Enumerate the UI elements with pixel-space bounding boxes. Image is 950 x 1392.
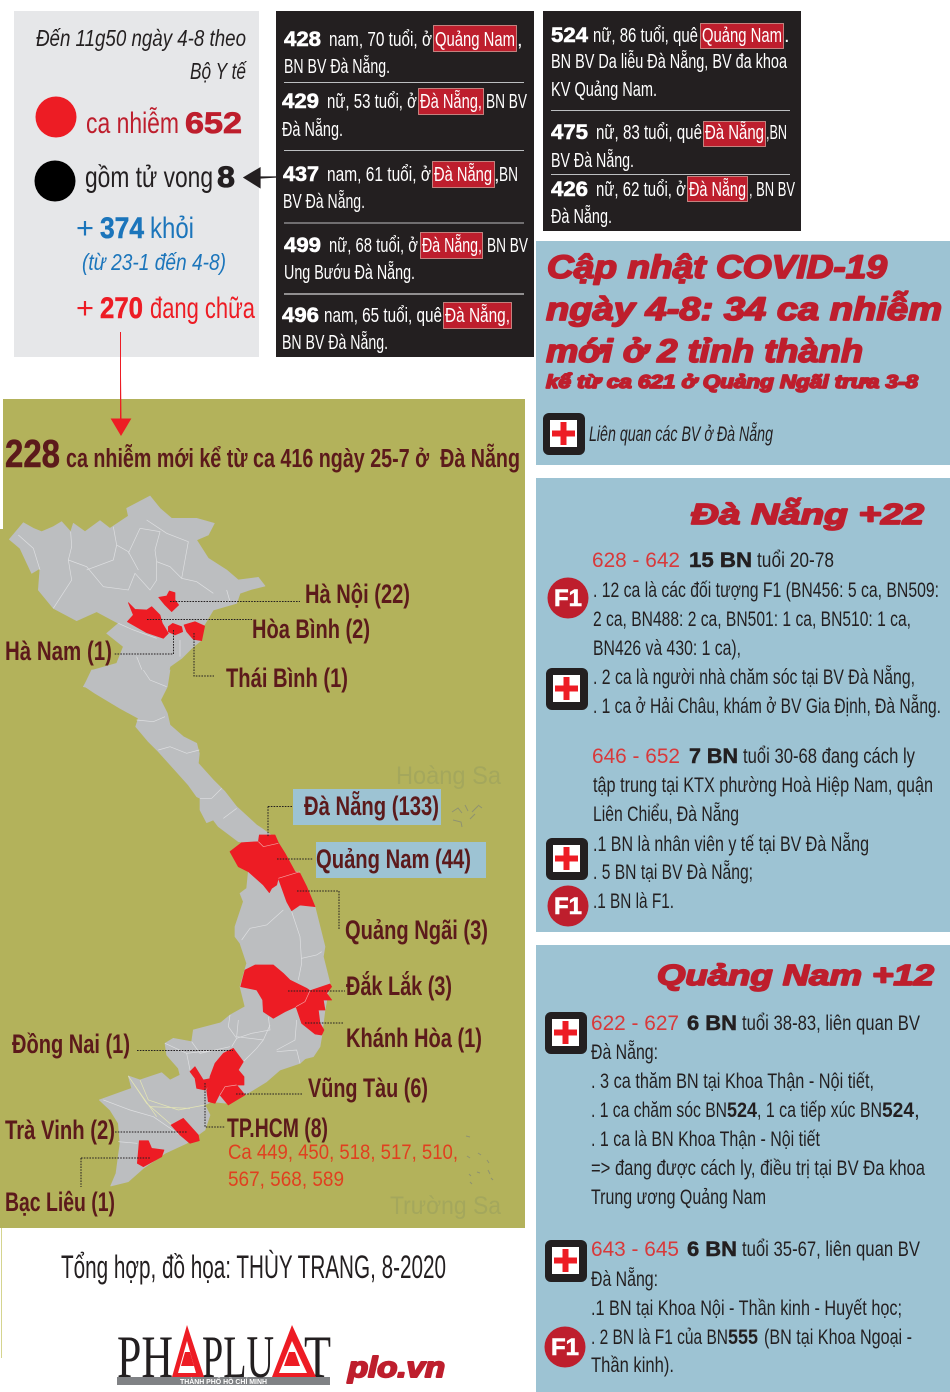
label: Ha Noi: Hà Nội (22) [305, 579, 410, 609]
province: Quang Ngai [278, 872, 315, 911]
map: central highlands land [207, 863, 330, 1063]
case group 622-627: 524 [882, 1099, 914, 1122]
label: Dong Nai: Đồng Nai (1) [12, 1029, 130, 1059]
case 437: BV Đà Nẵng. [283, 190, 365, 213]
case 499: Ung Bướu Đà Nẵng. [284, 261, 415, 284]
case 428: 428 [284, 28, 321, 51]
title: mới ở 2 tỉnh thành [546, 333, 863, 369]
label: Bac Lieu: Bạc Liêu (1) [5, 1187, 115, 1217]
case 429: nữ, 53 tuổi, ở [327, 91, 417, 113]
label: TP.HCM: TP.HCM (8) [227, 1113, 328, 1143]
icon: F1 badge [548, 886, 588, 926]
case 524: nữ, 86 tuổi, quê [593, 25, 698, 47]
case 524: BN BV Da liễu Đà Nẵng, BV đa khoa [551, 50, 788, 73]
label: Truong Sa: Trường Sa [390, 1192, 501, 1220]
case group 643-645: . 2 BN là F1 của BN [591, 1326, 728, 1349]
case 437: 437 [283, 163, 319, 186]
case group 643-645 [591, 1238, 920, 1377]
stat: total infections: ca nhiễm [86, 107, 179, 140]
stat: under treatment: + [76, 292, 94, 325]
case 428: , [517, 29, 523, 51]
case group 622-627: . 3 ca thăm BN tại Khoa Thận - Nội tiết, [591, 1070, 874, 1093]
logo: Phap Luat: PLU [202, 1324, 274, 1390]
legend label: Liên quan các BV ở Đà Nẵng [589, 423, 773, 446]
case group 622-627: . 1 ca chăm sóc BN [591, 1099, 727, 1122]
case 426: Đà Nẵng [689, 178, 746, 201]
case 426: 426 [551, 178, 588, 201]
case 499 [284, 232, 528, 284]
title: Cập nhật COVID-19 [547, 249, 887, 285]
icon: hospital legend [543, 413, 585, 455]
arrow: under-treatment to map [112, 332, 130, 435]
case 475: ,BN [766, 122, 787, 144]
label: Da Nang [293, 789, 441, 825]
stat: recovered: 374 [100, 212, 144, 245]
map title: ca nhiễm mới kể từ ca 416 ngày 25-7 ở Đà Nẵng [66, 443, 520, 473]
panel: national totals [14, 11, 259, 357]
panel: death list 1 [276, 11, 534, 357]
case 437: Đà Nẵng [434, 163, 492, 186]
case 475: Đà Nẵng [705, 121, 764, 144]
case 428: BN BV Đà Nẵng. [284, 55, 390, 78]
province: Ha Noi [159, 591, 179, 612]
case 428: Quảng Nam [435, 29, 515, 51]
stat: recovered: khỏi [150, 212, 194, 245]
text: source note [36, 25, 248, 84]
province: Bac Lieu [137, 1141, 164, 1167]
icon: F1 badge: F1 [551, 1334, 579, 1361]
province: Thai Binh [184, 622, 205, 641]
case group 628-642: 15 BN [689, 549, 752, 572]
case group 628-642: tuổi 20-78 [757, 549, 834, 572]
title [546, 249, 942, 392]
logo: Phap Luat: THÀNH PHỐ HỒ CHÍ MINH [180, 1376, 267, 1386]
case 524: . [784, 25, 790, 47]
icon: hospital [545, 1240, 587, 1282]
logo: Phap Luat: PH [117, 1324, 173, 1390]
icon: F1 badge [544, 1326, 586, 1368]
note: TP.HCM case numbers: 567, 568, 589 [228, 1168, 344, 1191]
icon: F1 badge: F1 [554, 893, 582, 920]
case 429: 429 [282, 90, 319, 113]
case group 646-652: Liên Chiểu, Đà Nẵng [593, 803, 739, 826]
case 524: Quảng Nam [702, 25, 782, 47]
case group 646-652: .1 BN là F1. [593, 890, 674, 913]
case 429: BN BV [486, 91, 527, 113]
case 426: , BN BV [749, 179, 795, 201]
islands: Truong Sa [466, 1136, 493, 1184]
case group 622-627 [591, 1012, 925, 1209]
map title [5, 433, 520, 476]
case 496: Đà Nẵng, [445, 304, 510, 327]
icon: hospital [546, 838, 588, 880]
case 437: BN [499, 164, 518, 186]
panel: death list 2 [543, 11, 801, 231]
logo: plo.vn: plo.vn [347, 1352, 445, 1384]
case 428 [284, 26, 523, 78]
note: TP.HCM case numbers: Ca 449, 450, 518, 517, 510, [228, 1141, 458, 1164]
case 426 [551, 176, 795, 228]
case 429: Đà Nẵng. [282, 118, 343, 141]
case group 628-642 [592, 549, 941, 718]
case 437 [283, 162, 518, 213]
note: TP.HCM case numbers [228, 1141, 458, 1191]
islands: Hoang Sa [452, 805, 482, 827]
case group 622-627: . 1 ca là BN Khoa Thận - Nội tiết [591, 1128, 820, 1151]
province: Ha Nam [168, 623, 183, 635]
case 437: , [494, 164, 500, 186]
stat: recovered [76, 212, 226, 275]
label: Tra Vinh: Trà Vinh (2) [5, 1115, 115, 1145]
case 496: BN BV Đà Nẵng. [282, 331, 388, 354]
stat: under treatment: 270 [100, 292, 143, 325]
case group 622-627: Đà Nẵng: [591, 1041, 658, 1064]
province: Khanh Hoa [296, 984, 332, 1035]
province: TP.HCM [190, 1067, 212, 1090]
icon: hospital [545, 1012, 587, 1054]
label: Da Nang: Đà Nẵng (133) [304, 791, 439, 821]
stat: total infections: 652 [185, 107, 242, 140]
label: Hoang Sa: Hoàng Sa [396, 762, 501, 790]
icon: red dot [36, 96, 76, 138]
case group 643-645: Đà Nẵng: [591, 1268, 658, 1291]
case 429 [282, 88, 527, 141]
map leader lines [81, 602, 345, 1187]
case group 643-645: 643 - 645 [591, 1238, 679, 1261]
case 475: 475 [551, 121, 588, 144]
logo: Phap Luat [117, 1324, 331, 1390]
heading: Quang Nam +12: Quảng Nam +12 [657, 960, 934, 992]
case group 628-642: 628 - 642 [592, 549, 680, 572]
stat: recovered: + [76, 212, 94, 245]
case group 646-652: .1 BN là nhân viên y tế tại BV Đà Nẵng [593, 833, 869, 856]
province: Quang Nam [230, 835, 295, 893]
panel: headline [536, 241, 950, 465]
title: ngày 4-8: 34 ca nhiễm [546, 291, 942, 327]
case 475: nữ, 83 tuổi, quê [596, 122, 702, 144]
map: northern Vietnam [9, 496, 265, 693]
case group 646-652 [592, 745, 933, 913]
arrow: death list to total [244, 168, 276, 188]
case group 646-652: 7 BN [689, 745, 738, 768]
case 496 [282, 302, 512, 354]
province: Dak Lak [241, 965, 310, 1018]
case 496: 496 [282, 304, 319, 327]
case group 622-627: 524 [727, 1099, 757, 1122]
logo: Phap Luat: T [304, 1324, 331, 1390]
icon: black dot [34, 160, 76, 202]
case group 622-627: , [914, 1099, 920, 1122]
stat: under treatment [76, 292, 255, 325]
label: Quang Nam: Quảng Nam (44) [316, 844, 471, 874]
case group 628-642: BN426 và 430: 1 ca), [593, 637, 741, 660]
icon: F1 badge [548, 578, 588, 618]
icon: hospital [546, 668, 588, 710]
label: Vung Tau: Vũng Tàu (6) [308, 1073, 428, 1103]
case 429: Đà Nẵng, [420, 90, 482, 113]
map title: 228 [5, 433, 60, 476]
map: north-central Vietnam [84, 670, 273, 843]
province: Dong Nai [207, 1048, 244, 1103]
stat: under treatment: đang chữa [150, 292, 255, 325]
case group 622-627: Trung ương Quảng Nam [591, 1186, 766, 1209]
icon: F1 badge: F1 [554, 585, 582, 612]
case 524: KV Quảng Nam. [551, 79, 657, 101]
case 475 [551, 121, 787, 172]
case group 643-645: 555 [728, 1326, 758, 1349]
stat: deaths: gồm tử vong [85, 161, 213, 194]
case 499: Đà Nẵng, [422, 234, 482, 257]
heading: Da Nang +22: Đà Nẵng +22 [691, 497, 924, 531]
panel: Quang Nam cases [536, 945, 950, 1392]
text: source note: Đến 11g50 ngày 4-8 theo [36, 25, 246, 51]
label: Hoa Binh: Hòa Bình (2) [252, 614, 370, 644]
case 499: nữ, 68 tuổi, ở [329, 235, 418, 257]
case 437: nam, 61 tuổi, ở [327, 164, 431, 186]
map: southern Vietnam [99, 1010, 323, 1186]
map: central Vietnam provinces [228, 835, 332, 1050]
case 428: nam, 70 tuổi, ở [329, 29, 432, 51]
case group 643-645: Thần kinh). [591, 1354, 674, 1377]
province: Vung Tau [220, 1085, 245, 1105]
stat: recovered: (từ 23-1 đến 4-8) [82, 249, 226, 275]
case group 643-645: 6 BN [687, 1238, 737, 1261]
province: Tra Vinh [171, 1118, 199, 1143]
case 496: nam, 65 tuổi, quê [324, 305, 442, 327]
case group 646-652: . 5 BN tại BV Đà Nẵng; [593, 861, 753, 884]
case 475: BV Đà Nẵng. [551, 149, 634, 172]
case 426: Đà Nẵng. [551, 205, 612, 228]
panel: Da Nang cases [536, 478, 950, 932]
panel: map background [0, 399, 525, 1358]
case group 646-652: 646 - 652 [592, 745, 680, 768]
label: Ha Nam: Hà Nam (1) [5, 636, 112, 666]
case group 622-627: , 1 ca tiếp xúc BN [757, 1099, 882, 1122]
text: source note: Bộ Y tế [190, 58, 248, 84]
label: Dak Lak: Đắk Lắk (3) [346, 971, 452, 1001]
province: Hoa Binh [127, 603, 168, 638]
label: Quang Ngai: Quảng Ngãi (3) [345, 915, 488, 945]
credit line: Tổng hợp, đồ họa: THÙY TRANG, 8-2020 [61, 1249, 446, 1285]
case 524 [551, 24, 790, 101]
case group 622-627: 6 BN [687, 1012, 737, 1035]
title: kể từ ca 621 ở Quảng Ngãi trưa 3-8 [546, 372, 918, 392]
case 499: 499 [284, 234, 321, 257]
stat: deaths: 8 [217, 161, 235, 194]
label: Thai Binh: Thái Bình (1) [226, 663, 348, 693]
case 499: BN BV [487, 235, 528, 257]
case group 622-627: 622 - 627 [591, 1012, 679, 1035]
label: Khanh Hoa: Khánh Hòa (1) [346, 1023, 482, 1053]
case 426: nữ, 62 tuổi, ở [596, 179, 686, 201]
case 524: 524 [551, 24, 588, 47]
